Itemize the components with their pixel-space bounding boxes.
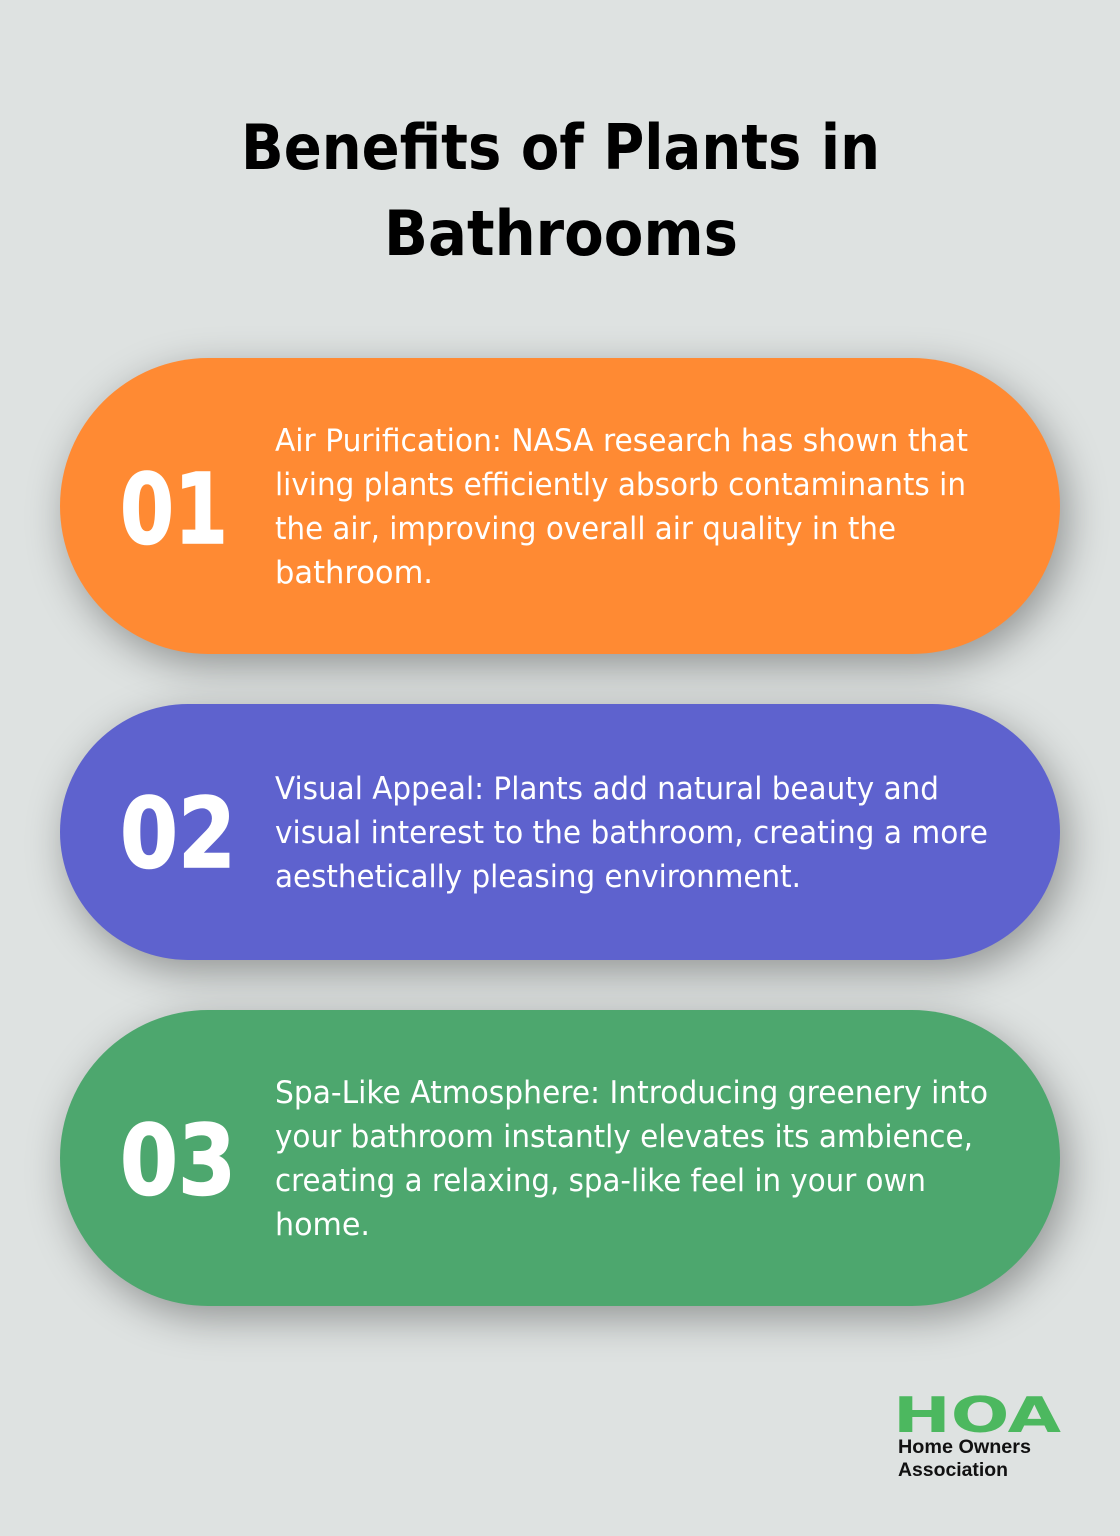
number 02: 02: [120, 777, 236, 890]
text: visual appeal: Visual Appeal: Plants add natural beauty and: [275, 771, 939, 807]
number 03: 03: [120, 1104, 236, 1217]
panel: air purification: [60, 358, 1060, 654]
text: air purification: bathroom.: [275, 555, 433, 591]
text: spa-like atmosphere: [275, 1075, 988, 1243]
title: Bathrooms: [384, 197, 738, 270]
text: spa-like atmosphere: Spa-Like Atmosphere: Introducing greenery into: [275, 1075, 988, 1111]
logo: HOA: Home Owners: [898, 1437, 1031, 1458]
text: visual appeal: [275, 771, 988, 895]
text: spa-like atmosphere: your bathroom instantly elevates its ambience,: [275, 1119, 973, 1155]
text: visual appeal: visual interest to the bathroom, creating a more: [275, 815, 988, 851]
logo: HOA: [893, 1387, 1061, 1481]
panel: spa-like atmosphere: [60, 1010, 1060, 1306]
text: air purification: living plants efficiently absorb contaminants in: [275, 467, 966, 503]
logo: HOA: Association: [898, 1460, 1008, 1481]
logo: HOA: HOA: [893, 1387, 1061, 1444]
text: visual appeal: aesthetically pleasing environment.: [275, 859, 801, 895]
text: air purification: Air Purification: NASA research has shown that: [275, 423, 968, 459]
title: Benefits of Plants in: [241, 111, 880, 184]
title: [241, 111, 880, 270]
text: air purification: the air, improving overall air quality in the: [275, 511, 896, 547]
text: air purification: [275, 423, 968, 591]
panel: visual appeal: [60, 704, 1060, 960]
text: spa-like atmosphere: creating a relaxing, spa-like feel in your own: [275, 1163, 926, 1199]
text: spa-like atmosphere: home.: [275, 1207, 370, 1243]
number 01: 01: [120, 453, 228, 566]
